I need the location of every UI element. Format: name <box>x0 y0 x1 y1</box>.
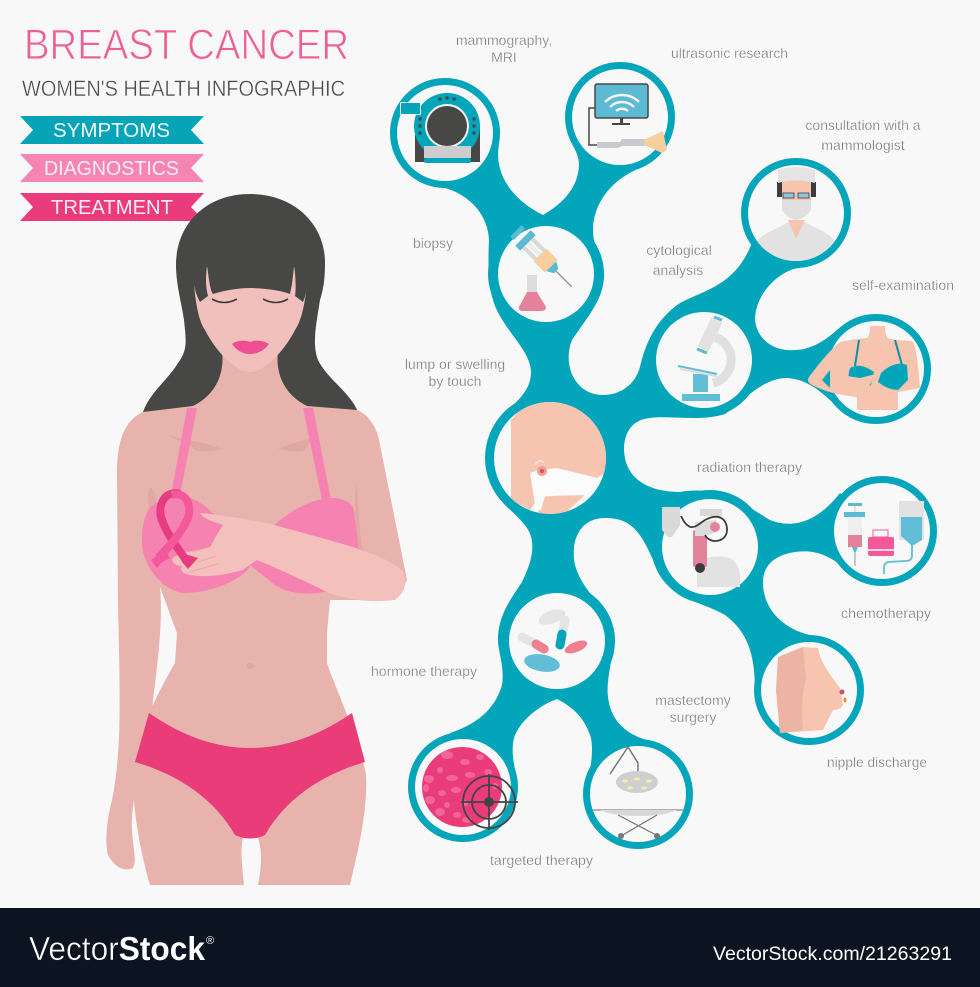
label: cytological analysis: cytological <box>646 242 712 258</box>
inner discs <box>397 69 930 842</box>
label: radiation therapy: radiation therapy <box>697 459 802 475</box>
ribbon: symptoms <box>20 116 204 144</box>
front arm and hand <box>172 513 405 601</box>
label: biopsy: biopsy <box>413 235 453 251</box>
ribbon: treatment <box>20 193 204 221</box>
footer URL: VectorStock.com/21263291 <box>713 944 952 965</box>
icon: surgical lamp and table <box>593 747 683 839</box>
eyelashes <box>212 299 288 302</box>
label: hormone therapy: hormone therapy <box>371 663 477 679</box>
label: lump or swelling by touch: lump or swelling <box>405 356 505 372</box>
woman figure <box>106 194 407 885</box>
label: nipple discharge: nipple discharge <box>827 754 927 770</box>
subtitle: WOMEN'S HEALTH INFOGRAPHIC <box>22 76 345 101</box>
awareness ribbon <box>151 493 198 569</box>
finger lines <box>190 547 218 572</box>
label: lump or swelling by touch: by touch <box>429 373 481 389</box>
label: mastectomy surgery: surgery <box>670 709 716 725</box>
label: ultrasonic research: ultrasonic research <box>671 45 788 61</box>
icon: chemotherapy set <box>844 501 924 574</box>
bra straps <box>171 408 331 500</box>
body <box>106 350 407 885</box>
bra cups <box>142 497 250 593</box>
arm gap <box>822 370 830 388</box>
ribbon: diagnostics <box>20 154 204 182</box>
label: mammography, MRI: mammography, <box>456 32 552 48</box>
icon: self-examination torso <box>808 326 920 410</box>
label: targeted therapy: targeted therapy <box>490 852 593 868</box>
icon: targeted tumour <box>422 747 518 830</box>
fringe <box>185 230 315 302</box>
icon: microscope <box>678 317 731 401</box>
collarbones and shadows <box>148 435 363 669</box>
label: chemotherapy: chemotherapy <box>841 605 931 621</box>
icon: syringe and flask <box>508 223 580 311</box>
footer logo: VectorStock <box>29 930 206 967</box>
label: consultation with a mammologist: mammologist <box>821 137 905 153</box>
outer rings <box>390 62 937 849</box>
icon: ultrasound machine <box>589 84 667 153</box>
label: mastectomy surgery: mastectomy <box>655 692 731 708</box>
label: cytological analysis: analysis <box>653 262 703 278</box>
hair <box>143 194 358 412</box>
label: mammography, MRI: MRI <box>491 49 517 65</box>
teal network diagram <box>390 62 937 849</box>
icon: pills <box>522 606 589 674</box>
ribbon: treatment: TREATMENT <box>51 197 173 219</box>
network connector shape <box>445 117 882 794</box>
lips <box>232 341 269 354</box>
icon: radiation therapy machine <box>662 507 740 587</box>
registered mark: ® <box>206 935 214 947</box>
icon: lump by touch <box>511 398 610 515</box>
footer bar <box>0 908 980 987</box>
face <box>193 250 308 372</box>
icon: MRI scanner <box>400 93 480 163</box>
label: consultation with a mammologist: consultation with a <box>805 117 921 133</box>
ribbon: symptoms: SYMPTOMS <box>53 120 170 142</box>
underwear <box>135 713 365 838</box>
icon: mammologist doctor <box>757 167 835 262</box>
label: self-examination: self-examination <box>852 277 954 293</box>
ribbon: diagnostics: DIAGNOSTICS <box>44 158 179 180</box>
icon: breast with nipple discharge <box>776 647 846 733</box>
title: BREAST CANCER <box>24 21 349 69</box>
